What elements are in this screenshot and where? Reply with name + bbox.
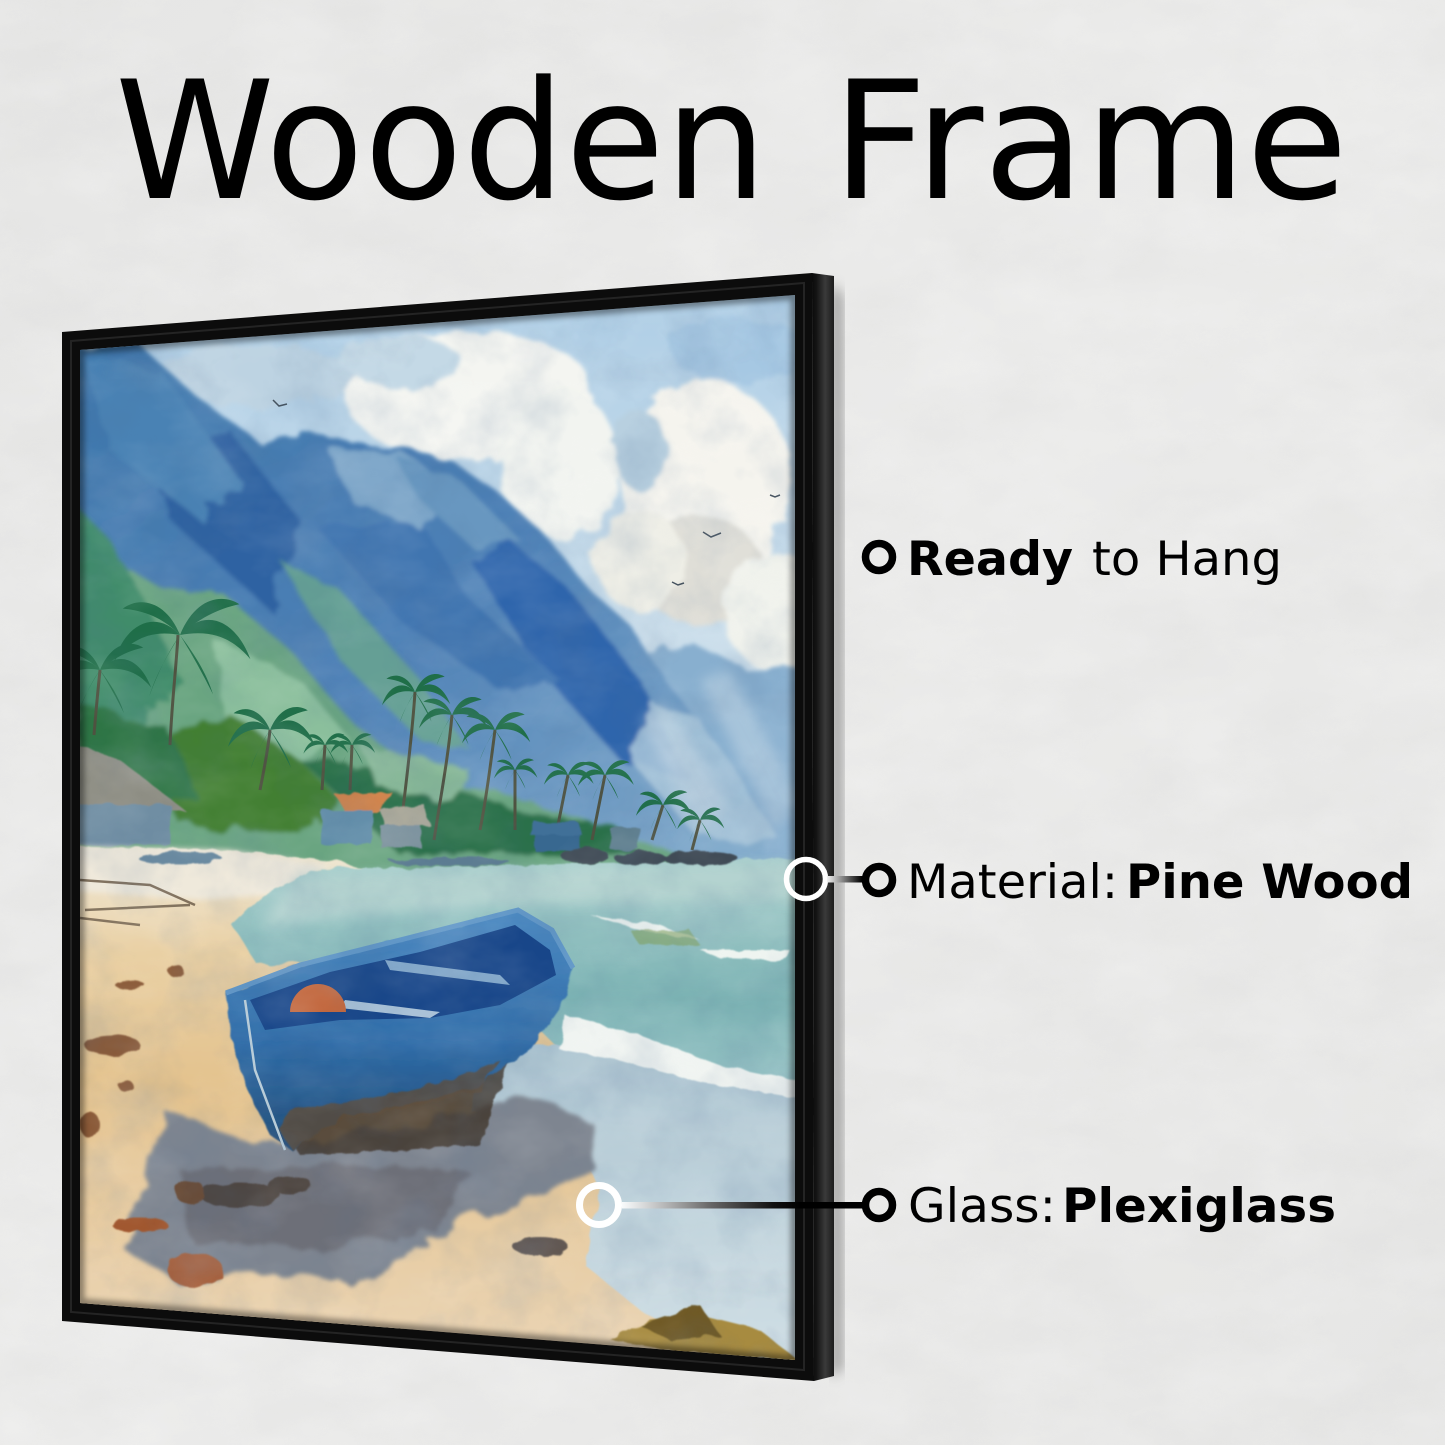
label: Material: [907,855,1118,910]
boat interior [250,925,556,1030]
pointer ring on frame [786,860,826,898]
callout: ready to hang: to Hang [1092,532,1282,587]
birds [273,400,780,585]
frame right side [812,273,834,1381]
painting base: sand [80,865,794,1360]
marker ring [866,1192,892,1218]
marker ring [866,544,892,570]
marker ring [866,866,892,894]
title [115,46,1348,237]
beach huts [76,745,640,851]
blue boat [226,910,573,1150]
frame shadow [832,282,842,1378]
sea [230,857,795,1080]
callout: material [786,855,1413,910]
mountains [60,345,840,870]
light rays [640,670,800,830]
boat hull [226,910,573,1150]
clouds [140,318,825,670]
painting: beach with blue boat [80,295,795,1360]
shore rocks [138,848,738,866]
frame front [62,273,814,1381]
title: Wooden [115,46,767,237]
callout: glass [580,1179,1336,1234]
callout: ready to hang [866,532,1282,587]
connector line [827,876,867,882]
boat shadow on sand [125,1095,595,1285]
picture frame [52,273,840,1381]
callout: material: Pine Wood [1126,855,1413,910]
boat rust [278,1060,500,1150]
title: Frame [832,46,1348,237]
sand beach [80,845,402,1329]
boat buoy [290,984,346,1012]
label: Ready [907,532,1073,587]
callout: glass: Plexiglass [1062,1179,1336,1234]
palm trees [52,599,724,850]
wet sand [473,1044,795,1360]
pointer ring on painting [580,1186,618,1224]
driftwood [80,880,195,925]
watercolor texture [70,285,805,1370]
label: Glass: [908,1179,1056,1234]
connector line [622,1202,867,1208]
green hillside [80,508,675,871]
beach stones [80,964,568,1287]
dune grass [610,1305,800,1362]
sky [80,295,795,675]
surf foam [558,914,795,1098]
glass vignette [80,295,795,1360]
